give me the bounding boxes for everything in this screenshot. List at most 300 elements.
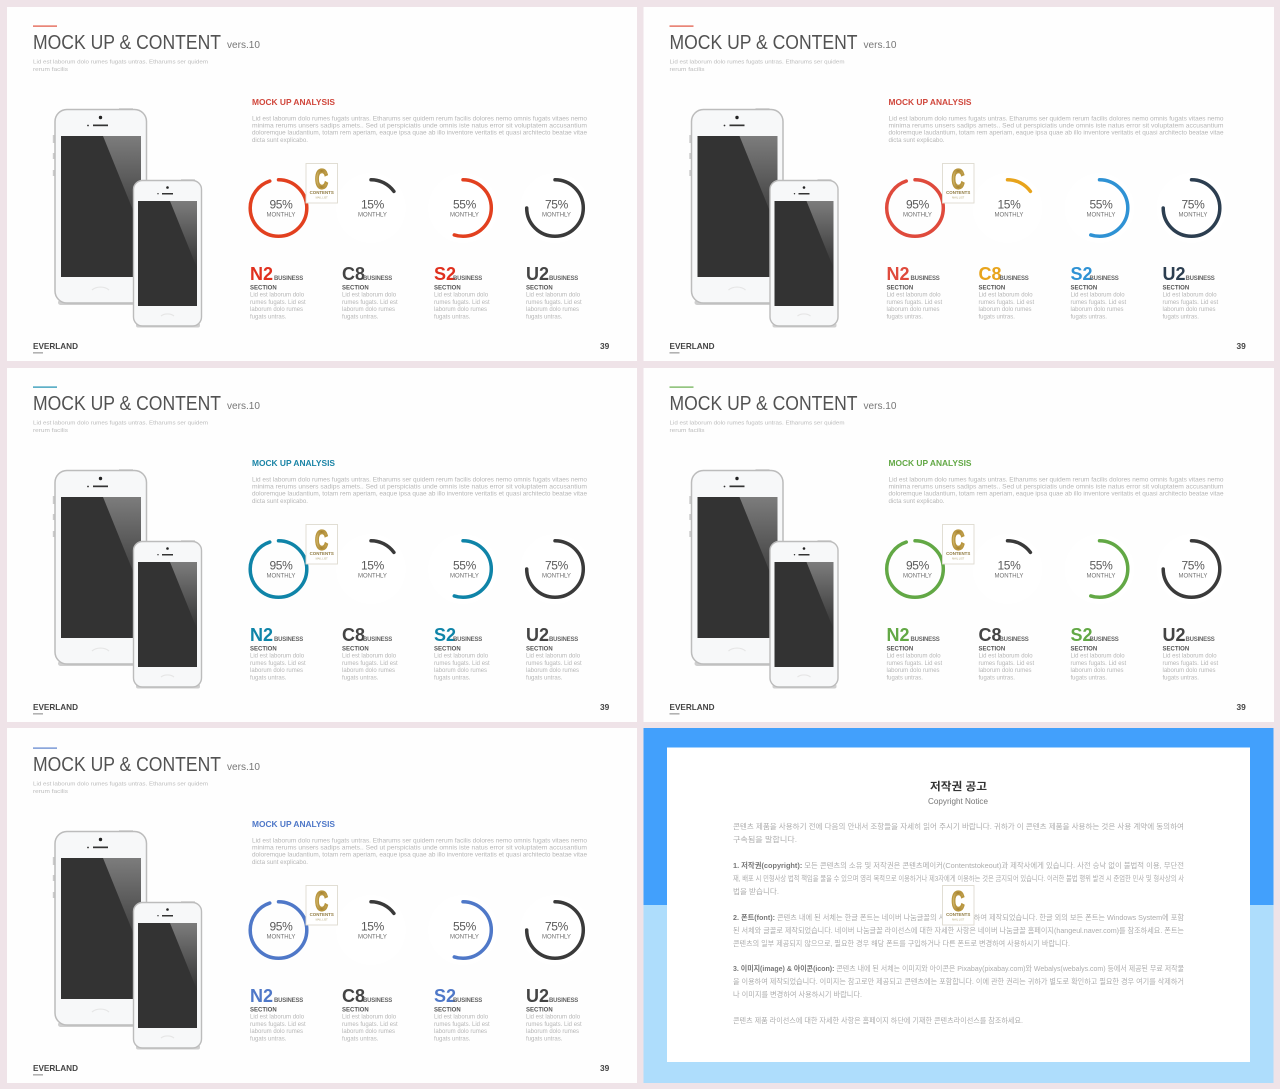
section C8: Lid est laborum dolo	[978, 292, 1033, 298]
notice closing: 콘텐츠 제품 라이선스에 대한 자세한 사항은 홈페이지 하단에 기재한 콘텐츠라이선스를 참조하세요.	[733, 1016, 1023, 1025]
title: MOCK UP & CONTENT	[670, 393, 858, 415]
footer brand: EVERLAND	[33, 702, 78, 712]
page number: 39	[1236, 341, 1246, 351]
section C8: fugats untras.	[978, 676, 1015, 682]
section S2: BUSINESS	[1090, 276, 1119, 282]
notice section 1	[733, 861, 1184, 896]
subtitle: Lid est laborum dolo rumes fugats untras. Etharums ser quidem	[33, 420, 208, 426]
analysis paragraph: dicta sunt explicabo.	[252, 138, 308, 144]
section N2: SECTION	[886, 646, 913, 652]
section C8: BUSINESS	[363, 637, 392, 643]
section C8: fugats untras.	[342, 1036, 379, 1042]
version label: vers.10	[864, 40, 897, 51]
section N2: Lid est laborum dolo	[250, 292, 305, 298]
section C8: rumes fugats. Lid est	[342, 661, 398, 667]
notice section 1: 재, 배포 시 민형사상 법적 책임을 물을 수 있으며 영리 목적으로 이용하거나 제3자에게 이용하는 것은 금지되어 있습니다. 이러한 불법 행위 발견 시 준엄한 민사 및 형사상의 사	[733, 874, 1184, 883]
section C8	[342, 264, 398, 320]
ring: 15%: MONTHLY	[995, 574, 1023, 580]
footer brand: EVERLAND	[670, 702, 714, 712]
section N2	[886, 625, 943, 682]
ring: 55%: 55%	[1089, 558, 1113, 572]
subtitle: Lid est laborum dolo rumes fugats untras. Etharums ser quidem	[33, 782, 208, 788]
ring: 75%: 75%	[1181, 197, 1205, 211]
section N2: fugats untras.	[250, 676, 287, 682]
section U2: fugats untras.	[526, 1036, 563, 1042]
section U2: laborum dolo rumes	[526, 668, 579, 674]
ring: 55%	[428, 534, 498, 604]
ring: 15%: MONTHLY	[358, 213, 387, 219]
accent line	[33, 26, 57, 27]
section U2: Lid est laborum dolo	[1162, 654, 1217, 660]
ring: 55%: MONTHLY	[450, 213, 479, 219]
section S2: laborum dolo rumes	[1070, 668, 1124, 674]
analysis paragraph: minima rerums unsers sadips amets.. Sed ut perspiciatis unde omnis iste natus error sit voluptatem accusantium	[888, 124, 1224, 130]
section U2: laborum dolo rumes	[526, 1029, 579, 1035]
subtitle: rerum facilis	[670, 67, 705, 73]
notice section 2: 콘텐츠의 일부 제공되지 않으므로, 필요한 경우 해당 폰트를 구입하거나 다른 폰트로 변경하여 사용하시기 바랍니다.	[733, 939, 1070, 948]
section S2: laborum dolo rumes	[434, 307, 487, 313]
section S2: BUSINESS	[1090, 637, 1119, 643]
ring: 95%: MONTHLY	[267, 574, 295, 580]
section C8	[978, 264, 1035, 320]
section C8: C8	[342, 264, 365, 284]
section S2: fugats untras.	[1070, 676, 1107, 682]
ring: 75%	[520, 534, 590, 604]
section N2: Lid est laborum dolo	[250, 654, 305, 660]
analysis paragraph: doloremque laudantium, totam rem aperiam, eaque ipsa quae ab illo inventore veritatis et quasi architecto beatae vitae	[888, 130, 1224, 136]
section S2: rumes fugats. Lid est	[434, 1022, 490, 1028]
watermark	[942, 524, 974, 564]
ring: 95%: 95%	[906, 197, 930, 211]
section U2: SECTION	[1162, 286, 1189, 292]
section N2	[886, 264, 943, 320]
section S2: laborum dolo rumes	[434, 1029, 487, 1035]
notice section 1: 법을 받습니다.	[733, 887, 779, 896]
section C8	[342, 986, 398, 1042]
ring: 75%: MONTHLY	[1179, 213, 1207, 219]
section S2: laborum dolo rumes	[1070, 307, 1124, 313]
section S2: S2	[434, 986, 456, 1006]
accent line	[670, 26, 694, 27]
section U2: fugats untras.	[1162, 314, 1199, 320]
ring: 15%	[972, 534, 1042, 604]
analysis paragraph: minima rerums unsers sadips amets.. Sed ut perspiciatis unde omnis iste natus error sit voluptatem accusantium	[252, 846, 587, 852]
ring: 15%: 15%	[361, 919, 385, 933]
section S2: fugats untras.	[434, 1036, 471, 1042]
section N2: fugats untras.	[886, 314, 923, 320]
ring: 95%	[887, 541, 943, 597]
title: MOCK UP & CONTENT	[33, 393, 221, 415]
notice section 1: 1. 저작권(copyright): 모든 콘텐츠의 소유 및 저작권은 콘텐츠메이커(Contentstokeout)과 제작사에게 있습니다. 사전 승낙 없이 불법적 이용, 무단전	[733, 861, 1184, 870]
subtitle	[33, 420, 208, 434]
section S2: fugats untras.	[434, 314, 471, 320]
ring: 15%: 15%	[997, 558, 1021, 572]
section N2	[250, 986, 306, 1042]
notice section 2: 2. 폰트(font): 콘텐츠 내에 된 서체는 한글 폰트는 네이버 나눔글꼴의 서체를 사용하여 제작되었습니다. 한글 외의 보든 폰트는 Windows System에 포함	[733, 913, 1184, 922]
ring: 55%	[1064, 173, 1134, 243]
section C8: Lid est laborum dolo	[342, 292, 397, 298]
phone mockups	[53, 830, 201, 1050]
section N2: Lid est laborum dolo	[250, 1014, 305, 1020]
ring: 75%: MONTHLY	[542, 935, 571, 941]
page number: 39	[600, 1063, 610, 1073]
section C8: C8	[978, 625, 1002, 645]
section N2: rumes fugats. Lid est	[886, 300, 943, 306]
section N2: N2	[250, 986, 273, 1006]
ring: 55%	[1064, 534, 1134, 604]
section U2: laborum dolo rumes	[1162, 668, 1216, 674]
analysis paragraph	[252, 838, 588, 866]
ring: 75%	[520, 895, 590, 965]
section S2	[434, 264, 490, 320]
analysis paragraph: minima rerums unsers sadips amets.. Sed ut perspiciatis unde omnis iste natus error sit voluptatem accusantium	[888, 484, 1224, 490]
notice section 3: 나 이미지를 변경하여 사용하시기 바랍니다.	[733, 990, 862, 999]
section S2	[1070, 625, 1127, 682]
section C8: rumes fugats. Lid est	[978, 661, 1035, 667]
section U2: BUSINESS	[549, 998, 578, 1004]
section U2: SECTION	[1162, 646, 1189, 652]
subtitle: Lid est laborum dolo rumes fugats untras. Etharums ser quidem	[670, 420, 845, 426]
section S2: Lid est laborum dolo	[434, 654, 489, 660]
section U2: SECTION	[526, 646, 553, 652]
section N2: N2	[250, 264, 273, 284]
section S2: Lid est laborum dolo	[1070, 654, 1125, 660]
section N2: laborum dolo rumes	[886, 668, 940, 674]
section C8	[342, 625, 398, 682]
section U2: Lid est laborum dolo	[526, 1014, 581, 1020]
section C8: SECTION	[342, 286, 369, 292]
section U2	[1162, 264, 1219, 320]
section U2: Lid est laborum dolo	[526, 654, 581, 660]
section S2: Lid est laborum dolo	[434, 1014, 489, 1020]
section S2	[1070, 264, 1127, 320]
section U2: laborum dolo rumes	[1162, 307, 1216, 313]
section C8: C8	[342, 986, 365, 1006]
section U2: U2	[526, 986, 549, 1006]
accent line	[33, 748, 57, 749]
section N2	[250, 625, 306, 682]
ring: 15%: MONTHLY	[995, 213, 1023, 219]
section U2: SECTION	[526, 286, 553, 292]
ring: 15%	[336, 895, 406, 965]
section S2: rumes fugats. Lid est	[434, 300, 490, 306]
section S2: rumes fugats. Lid est	[1070, 300, 1127, 306]
section C8: BUSINESS	[363, 998, 392, 1004]
analysis heading: MOCK UP ANALYSIS	[252, 98, 336, 107]
section U2: rumes fugats. Lid est	[526, 661, 582, 667]
section N2: laborum dolo rumes	[250, 1029, 303, 1035]
ring: 15%	[972, 173, 1042, 243]
analysis paragraph	[888, 116, 1224, 144]
version label: vers.10	[227, 401, 260, 412]
ring: 95%: 95%	[906, 558, 930, 572]
section C8: C8	[342, 625, 365, 645]
analysis paragraph	[252, 116, 588, 144]
section S2: BUSINESS	[453, 276, 482, 282]
section N2: rumes fugats. Lid est	[886, 661, 943, 667]
page number: 39	[600, 341, 610, 351]
section C8: rumes fugats. Lid est	[342, 300, 398, 306]
ring: 95%: MONTHLY	[267, 935, 295, 941]
section N2: fugats untras.	[886, 676, 923, 682]
ring: 95%	[250, 902, 307, 958]
analysis paragraph: minima rerums unsers sadips amets.. Sed ut perspiciatis unde omnis iste natus error sit voluptatem accusantium	[252, 484, 587, 490]
notice section 3	[733, 964, 1184, 999]
section S2: SECTION	[434, 646, 461, 652]
analysis paragraph: dicta sunt explicabo.	[888, 138, 945, 144]
section C8	[978, 625, 1035, 682]
panel: slide 3 teal	[7, 368, 637, 722]
ring: 15%: 15%	[361, 197, 385, 211]
analysis paragraph: doloremque laudantium, totam rem aperiam, eaque ipsa quae ab illo inventore veritatis et quasi architecto beatae vitae	[252, 492, 588, 498]
section N2: BUSINESS	[910, 637, 940, 643]
section C8: Lid est laborum dolo	[978, 654, 1033, 660]
section U2	[526, 625, 582, 682]
section N2: N2	[886, 264, 910, 284]
analysis heading: MOCK UP ANALYSIS	[252, 820, 336, 829]
section N2: BUSINESS	[274, 998, 303, 1004]
ring: 95%	[250, 541, 307, 597]
section S2: rumes fugats. Lid est	[1070, 661, 1127, 667]
ring: 95%: MONTHLY	[267, 213, 295, 219]
section S2	[434, 986, 490, 1042]
section U2: BUSINESS	[1186, 637, 1215, 643]
section S2: S2	[434, 264, 456, 284]
section U2: SECTION	[526, 1008, 553, 1014]
section N2: N2	[886, 625, 910, 645]
ring: 55%	[428, 895, 498, 965]
analysis paragraph: dicta sunt explicabo.	[252, 860, 308, 866]
section S2: BUSINESS	[453, 637, 482, 643]
notice section 3: 을 이용하여 제작되었습니다. 이미지는 참고로만 제공되고 콘텐츠에는 포함합니다. 이에 관한 권리는 귀하가 별도로 확인하고 필요한 경우 여기를 삭제하거	[733, 977, 1184, 986]
analysis heading: MOCK UP ANALYSIS	[888, 459, 972, 468]
ring: 75%: MONTHLY	[542, 574, 571, 580]
section U2: fugats untras.	[1162, 676, 1199, 682]
ring: 55%: MONTHLY	[1087, 213, 1115, 219]
watermark	[942, 164, 974, 203]
notice subtitle: Copyright Notice	[928, 797, 989, 806]
footer brand: EVERLAND	[670, 341, 714, 351]
section C8: rumes fugats. Lid est	[978, 300, 1035, 306]
ring: 75%	[1156, 173, 1226, 243]
section N2: laborum dolo rumes	[250, 668, 303, 674]
ring: 15%: 15%	[361, 558, 385, 572]
watermark	[306, 524, 338, 564]
ring: 75%: 75%	[1181, 558, 1205, 572]
section N2: rumes fugats. Lid est	[250, 300, 306, 306]
subtitle: rerum facilis	[33, 428, 68, 434]
section N2: N2	[250, 625, 273, 645]
section N2: SECTION	[886, 286, 913, 292]
section N2: SECTION	[250, 1008, 277, 1014]
section U2: laborum dolo rumes	[526, 307, 579, 313]
ring: 95%: 95%	[269, 558, 293, 572]
section U2: U2	[526, 264, 549, 284]
page number: 39	[1236, 702, 1246, 712]
watermark	[942, 886, 974, 925]
section N2	[250, 264, 306, 320]
section C8: fugats untras.	[342, 314, 379, 320]
section U2: Lid est laborum dolo	[526, 292, 581, 298]
section U2: rumes fugats. Lid est	[526, 300, 582, 306]
section U2: fugats untras.	[526, 676, 563, 682]
analysis paragraph: Lid est laborum dolo rumes fugats untras. Etharums ser quidem rerum facilis dolores nemo omnis fugats vitaes nemo	[888, 116, 1224, 122]
section S2: fugats untras.	[434, 676, 471, 682]
panel: slide 1 red	[7, 7, 637, 361]
subtitle: rerum facilis	[33, 67, 68, 73]
ring: 75%	[1156, 534, 1226, 604]
analysis paragraph: Lid est laborum dolo rumes fugats untras. Etharums ser quidem rerum facilis dolores nemo omnis fugats vitaes nemo	[888, 478, 1224, 484]
section C8: laborum dolo rumes	[978, 307, 1032, 313]
section S2: Lid est laborum dolo	[1070, 292, 1125, 298]
section N2: BUSINESS	[274, 276, 303, 282]
analysis heading: MOCK UP ANALYSIS	[888, 98, 972, 107]
section N2: SECTION	[250, 286, 277, 292]
subtitle: Lid est laborum dolo rumes fugats untras. Etharums ser quidem	[33, 60, 208, 66]
ring: 15%: 15%	[997, 197, 1021, 211]
ring: 95%: MONTHLY	[903, 213, 932, 219]
section U2: BUSINESS	[1186, 276, 1215, 282]
section U2: Lid est laborum dolo	[1162, 292, 1217, 298]
ring: 55%: 55%	[453, 197, 477, 211]
footer brand: EVERLAND	[33, 341, 78, 351]
section S2: S2	[434, 625, 456, 645]
section C8: laborum dolo rumes	[978, 668, 1032, 674]
ring: 95%	[250, 180, 307, 236]
subtitle: Lid est laborum dolo rumes fugats untras. Etharums ser quidem	[670, 60, 845, 66]
section C8: SECTION	[342, 1008, 369, 1014]
notice section 2: 된 서체와 글꼴로 제작되었습니다. 네이버 나눔글꼴 라이선스에 대한 자세한 사항은 네이버 나눔글꼴 홈페이지(hangeul.naver.com)를 참조하세요. 폰트는	[733, 926, 1184, 935]
ring: 95%: MONTHLY	[903, 574, 932, 580]
ring: 15%	[336, 173, 406, 243]
notice section 3: 3. 이미지(image) & 아이콘(icon): 콘텐츠 내에 된 서체는 이미지와 아이콘은 Pixabay(pixabay.com)와 Webalys(webalys.com) 등에서 제공된 무료 저작물	[733, 964, 1184, 973]
section U2: BUSINESS	[549, 637, 578, 643]
section U2: rumes fugats. Lid est	[1162, 661, 1219, 667]
phone mockups	[53, 469, 201, 688]
section S2: SECTION	[434, 286, 461, 292]
version label: vers.10	[227, 40, 260, 51]
ring: 55%: 55%	[453, 919, 477, 933]
section C8: Lid est laborum dolo	[342, 1014, 397, 1020]
section N2: Lid est laborum dolo	[886, 292, 941, 298]
section C8: BUSINESS	[363, 276, 392, 282]
section C8: laborum dolo rumes	[342, 668, 395, 674]
section U2: rumes fugats. Lid est	[526, 1022, 582, 1028]
notice intro: 구속됨을 말합니다.	[733, 835, 797, 844]
subtitle	[670, 60, 845, 73]
ring: 55%: MONTHLY	[450, 574, 479, 580]
phone mockups	[53, 108, 201, 328]
section S2: SECTION	[1070, 286, 1097, 292]
section S2: SECTION	[434, 1008, 461, 1014]
version label: vers.10	[864, 401, 897, 412]
section N2: laborum dolo rumes	[886, 307, 940, 313]
ring: 75%: 75%	[545, 919, 569, 933]
panel: slide 4 green	[644, 368, 1274, 722]
ring: 55%	[428, 173, 498, 243]
section S2: SECTION	[1070, 646, 1097, 652]
section S2: rumes fugats. Lid est	[434, 661, 490, 667]
section C8: rumes fugats. Lid est	[342, 1022, 398, 1028]
ring: 75%: MONTHLY	[542, 213, 571, 219]
section N2: SECTION	[250, 646, 277, 652]
analysis paragraph: doloremque laudantium, totam rem aperiam, eaque ipsa quae ab illo inventore veritatis et quasi architecto beatae vitae	[888, 492, 1224, 498]
section C8: BUSINESS	[1000, 637, 1029, 643]
notice intro: 콘텐츠 제품을 사용하기 전에 다음의 안내서 조항들을 자세히 읽어 주시기 바랍니다. 귀하가 이 콘텐츠 제품을 사용하는 것은 사용 계약에 동의하여	[733, 822, 1184, 831]
section C8: SECTION	[978, 286, 1005, 292]
section U2: rumes fugats. Lid est	[1162, 300, 1219, 306]
section C8: fugats untras.	[342, 676, 379, 682]
section U2: U2	[1162, 625, 1186, 645]
section N2: Lid est laborum dolo	[886, 654, 941, 660]
ring: 95%: 95%	[269, 919, 293, 933]
section C8: Lid est laborum dolo	[342, 654, 397, 660]
analysis paragraph: Lid est laborum dolo rumes fugats untras. Etharums ser quidem rerum facilis dolores nemo omnis fugats vitaes nemo	[252, 116, 588, 122]
section S2: fugats untras.	[1070, 314, 1107, 320]
section N2: rumes fugats. Lid est	[250, 661, 306, 667]
section S2	[434, 625, 490, 682]
accent line	[33, 386, 57, 388]
section C8: SECTION	[342, 646, 369, 652]
ring: 75%: 75%	[545, 558, 569, 572]
section U2: U2	[1162, 264, 1186, 284]
subtitle	[670, 420, 845, 434]
panel: copyright notice	[644, 728, 1274, 1083]
subtitle: rerum facilis	[670, 428, 705, 434]
analysis paragraph	[888, 478, 1224, 505]
ring: 95%: 95%	[269, 197, 293, 211]
phone mockups	[689, 108, 838, 328]
analysis paragraph: minima rerums unsers sadips amets.. Sed ut perspiciatis unde omnis iste natus error sit voluptatem accusantium	[252, 124, 587, 130]
ring: 75%: 75%	[545, 197, 569, 211]
panel: slide 2 multicolour	[644, 7, 1274, 361]
ring: 15%: MONTHLY	[358, 574, 387, 580]
title: MOCK UP & CONTENT	[33, 32, 221, 54]
analysis paragraph: doloremque laudantium, totam rem aperiam, eaque ipsa quae ab illo inventore veritatis et quasi architecto beatae vitae	[252, 852, 588, 858]
section S2: BUSINESS	[453, 998, 482, 1004]
footer brand: EVERLAND	[33, 1063, 78, 1073]
section N2: fugats untras.	[250, 1036, 287, 1042]
ring: 75%	[520, 173, 590, 243]
section C8: laborum dolo rumes	[342, 1029, 395, 1035]
section C8: fugats untras.	[978, 314, 1015, 320]
section C8: BUSINESS	[1000, 276, 1029, 282]
title: MOCK UP & CONTENT	[33, 754, 221, 776]
analysis heading: MOCK UP ANALYSIS	[252, 459, 336, 468]
accent line	[670, 386, 694, 388]
notice intro	[733, 822, 1184, 844]
section U2	[1162, 625, 1219, 682]
analysis paragraph: Lid est laborum dolo rumes fugats untras. Etharums ser quidem rerum facilis dolores nemo omnis fugats vitaes nemo	[252, 838, 588, 844]
section U2: U2	[526, 625, 549, 645]
ring: 15%: MONTHLY	[358, 935, 387, 941]
section C8: C8	[978, 264, 1002, 284]
section N2: laborum dolo rumes	[250, 307, 303, 313]
ring: 15%	[336, 534, 406, 604]
analysis paragraph: doloremque laudantium, totam rem aperiam, eaque ipsa quae ab illo inventore veritatis et quasi architecto beatae vitae	[252, 130, 588, 136]
section S2: S2	[1070, 625, 1093, 645]
section N2: BUSINESS	[910, 276, 940, 282]
ring: 55%: MONTHLY	[450, 935, 479, 941]
watermark	[306, 164, 338, 203]
page number: 39	[600, 702, 610, 712]
notice section 2	[733, 913, 1184, 948]
section N2: BUSINESS	[274, 637, 303, 643]
analysis paragraph: dicta sunt explicabo.	[252, 499, 308, 505]
ring: 55%: 55%	[1089, 197, 1113, 211]
ring: 95%	[887, 180, 943, 236]
section S2: Lid est laborum dolo	[434, 292, 489, 298]
